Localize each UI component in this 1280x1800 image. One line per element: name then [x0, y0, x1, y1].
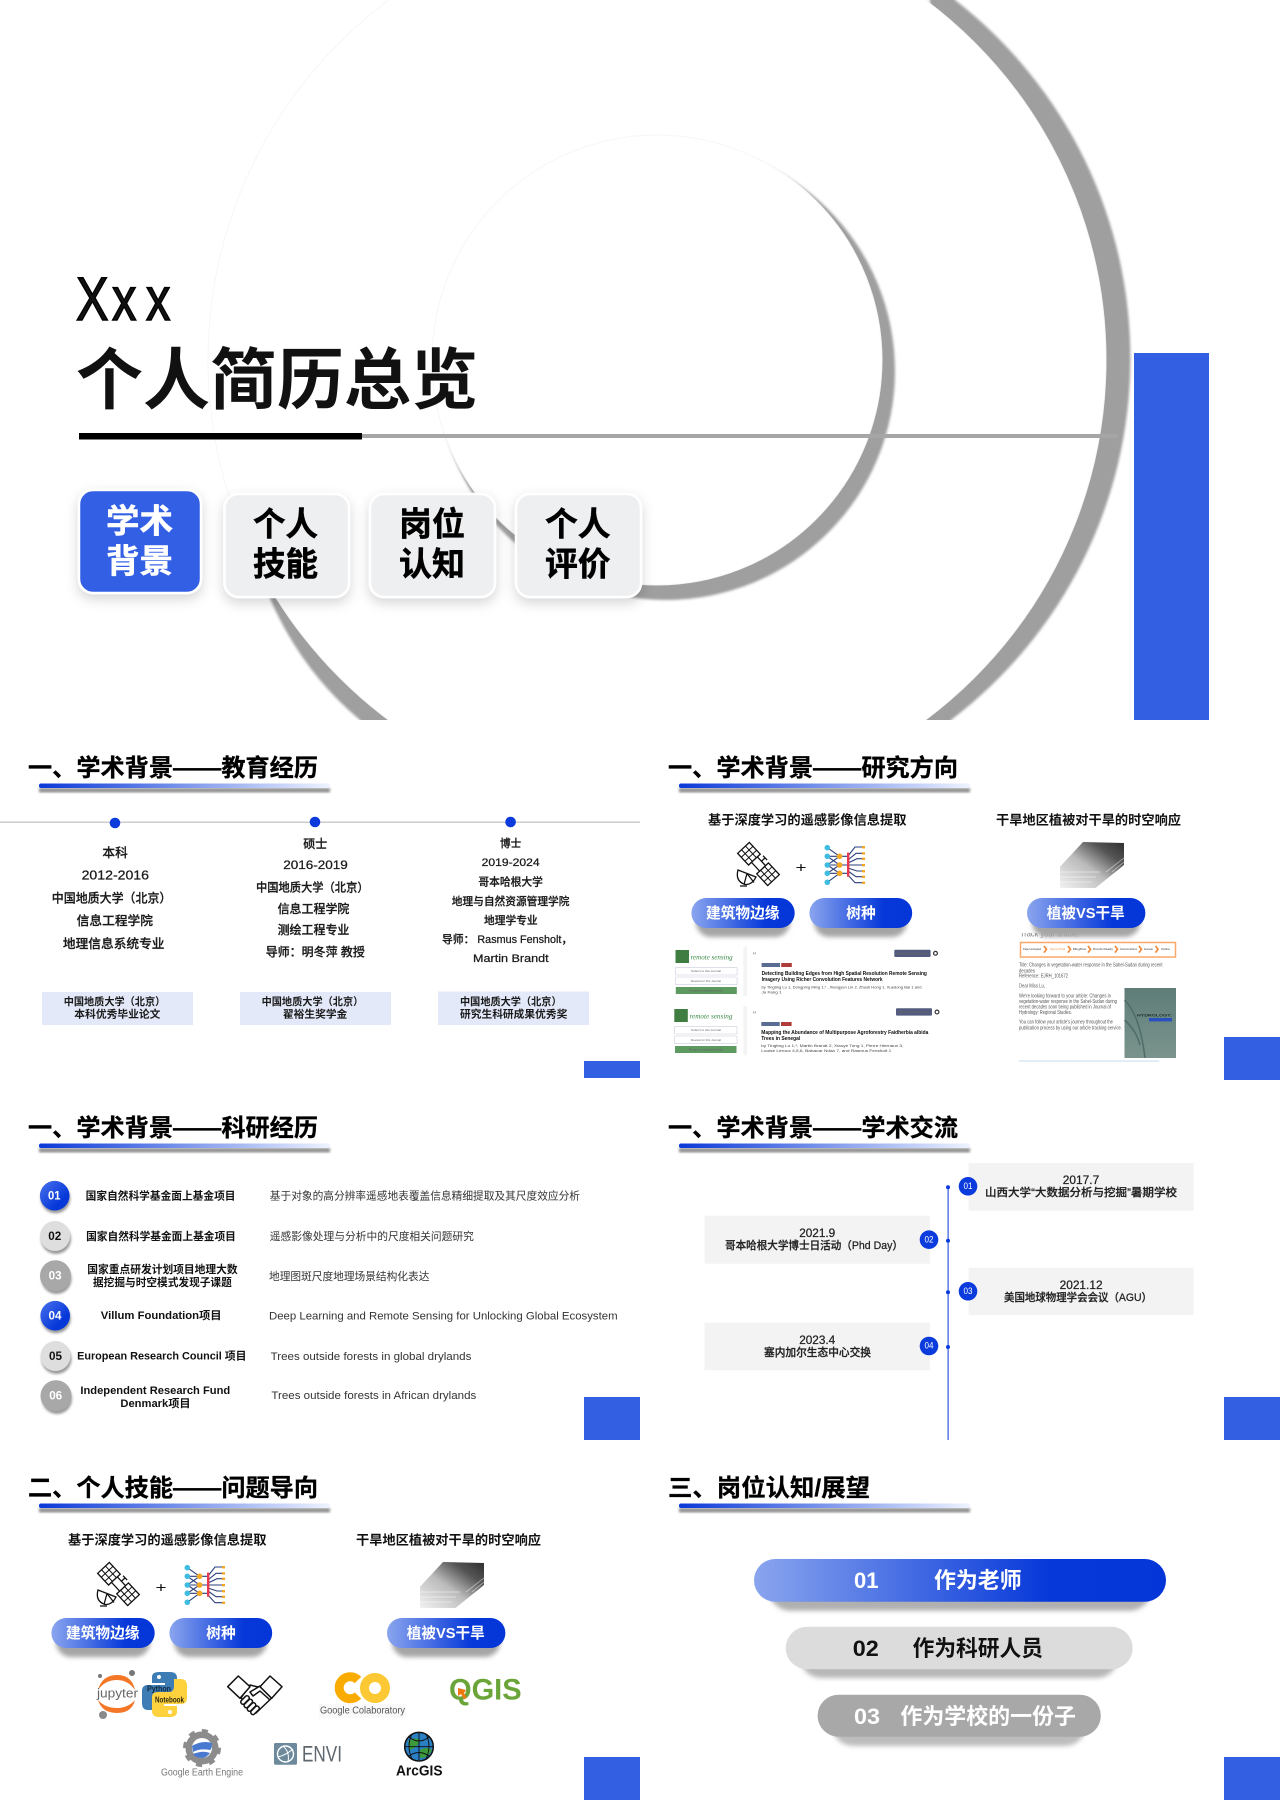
pill: building edges — [51, 1618, 155, 1657]
logo: envi — [274, 1742, 342, 1766]
row 05 — [40, 1341, 471, 1374]
row 04: Villum Foundation项目 — [101, 1310, 222, 1322]
award box 3 — [438, 992, 589, 1025]
thumbnail: journal letter: Hydrology: Regional Studies. — [1019, 1010, 1072, 1016]
thumbnail: journal letter: We're looking forward to your article: Changes in — [1019, 993, 1111, 999]
corner block — [584, 1397, 640, 1440]
pill: tree species: 树种 — [846, 904, 876, 922]
thumbnail: journal letter: Proofs Ready — [1093, 947, 1114, 951]
inner white circle — [432, 135, 882, 585]
thumbnail: journal letter: Rights — [1073, 947, 1087, 951]
outer white circle — [208, 0, 1106, 720]
bar 03: as a school member: 作为学校的一份子 — [900, 1704, 1076, 1729]
vertical timeline — [946, 1185, 950, 1440]
thumbnail: paper 1: H — [753, 950, 756, 956]
nav pill: personal skills: 个人 — [253, 506, 318, 542]
thumbnail: paper 1: Detecting Building Edges from High Spatial Resolution Remote Sensing — [762, 971, 927, 977]
image: data cube — [420, 1562, 484, 1608]
nav pill: academic background: 背景 — [106, 542, 173, 580]
thumbnail: journal letter: HYDROLOGY: — [1137, 1012, 1172, 1018]
thumbnail: paper 2 — [674, 1006, 939, 1055]
thumbnail: paper 1: Imagery Using Richer Convolution Features Network — [762, 977, 883, 983]
column: master: 信息工程学院 — [278, 901, 349, 916]
thumbnail: journal letter: Paper Accepted — [1023, 947, 1042, 951]
logo: jupyter: jupyter — [96, 1686, 139, 1700]
title: name: Xxx — [76, 265, 171, 333]
event 2021.12: 2021.12 — [1060, 1278, 1103, 1292]
heading: academic exchange: 一、学术背景——学术交流 — [668, 1114, 958, 1142]
award box 2 — [240, 992, 391, 1025]
subheading: drought response: 干旱地区植被对干旱的时空响应 — [996, 812, 1181, 828]
column: master: 测绘工程专业 — [278, 922, 349, 937]
award box 3: 中国地质大学（北京） — [460, 995, 562, 1008]
subheading: drought response: 干旱地区植被对干旱的时空响应 — [356, 1532, 541, 1548]
thumbnail: journal letter: Issue — [1144, 947, 1154, 951]
thumbnail: paper 1 — [676, 947, 937, 996]
column: phd: 哥本哈根大学 — [478, 874, 543, 888]
panel: research experience — [28, 1115, 640, 1440]
icon: handshake — [228, 1676, 282, 1715]
column: phd: 地理学专业 — [484, 913, 538, 927]
heading underline — [679, 784, 970, 792]
column: phd: Martin Brandt — [473, 953, 549, 965]
timeline dot 1 — [110, 818, 120, 828]
row 06: Trees outside forests in African drylands — [271, 1390, 476, 1402]
event 2021.9: 2021.9 — [799, 1226, 836, 1240]
row 03: 地理图斑尺度地理场景结构化表达 — [269, 1270, 430, 1283]
award box 1: 中国地质大学（北京） — [64, 995, 165, 1008]
corner block — [584, 1757, 640, 1800]
column: bachelor: 地理信息系统专业 — [63, 936, 164, 951]
logo: envi: ENVI — [302, 1742, 342, 1766]
event 2021.9 — [704, 1216, 938, 1264]
bar 01: as a teacher — [754, 1559, 1166, 1611]
thumbnail: journal letter: decades — [1019, 968, 1035, 974]
row 06: Denmark项目 — [120, 1398, 191, 1410]
logo: arcgis: ArcGIS — [396, 1762, 442, 1780]
column: bachelor — [52, 846, 171, 951]
nav pill: self evaluation: 评价 — [545, 546, 611, 582]
event 2017.7: 2017.7 — [1063, 1173, 1100, 1187]
inner circle shadow — [437, 142, 895, 600]
subheading: deep learning: 基于深度学习的遥感影像信息提取 — [708, 812, 906, 828]
panel: job outlook — [668, 1474, 1280, 1800]
row 02: 国家自然科学基金面上基金项目 — [86, 1230, 236, 1243]
event 2023.4: 塞内加尔生态中心交换 — [764, 1345, 871, 1359]
pill: vegetation vs drought — [387, 1618, 505, 1657]
event 2017.7: 01 — [964, 1181, 972, 1192]
thumbnail: journal letter: recent decades soon being published in Journal of — [1019, 1004, 1112, 1010]
bar 02: as a researcher: 作为科研人员 — [913, 1636, 1043, 1661]
thumbnail: paper 2: Review for this Journal — [691, 1038, 721, 1042]
thumbnail: paper 2: by Tingting Lu 1,*, Martin Brandt 2, Xiaoye Tong 1, Pierre Hiernaux 3, — [761, 1044, 903, 1048]
row 05: Trees outside forests in global drylands — [271, 1351, 471, 1363]
outer circle shadow — [268, 0, 1130, 726]
timeline dot 2 — [310, 817, 320, 827]
column: master: 硕士 — [303, 837, 327, 851]
icon: neural network — [824, 845, 865, 885]
logo: arcgis — [396, 1732, 442, 1780]
logo: google colaboratory: Google Colaboratory — [320, 1706, 405, 1716]
event 2023.4: 04 — [924, 1341, 934, 1352]
column: bachelor: 本科 — [102, 846, 128, 860]
heading underline — [679, 1504, 970, 1512]
row 01: 基于对象的高分辨率遥感地表覆盖信息精细提取及其尺度效应分析 — [270, 1190, 580, 1203]
panel: research direction — [668, 754, 1280, 1080]
logo: python notebook — [142, 1672, 187, 1717]
thumbnail: paper 1: Propose a Special Issue — [689, 988, 723, 992]
row 04 — [40, 1301, 618, 1333]
timeline dot 3 — [505, 817, 516, 827]
icon: satellite — [737, 842, 780, 886]
thumbnail: paper 1: remote sensing — [691, 952, 733, 962]
row 02: 遥感影像处理与分析中的尺度相关问题研究 — [270, 1230, 474, 1243]
pill: vegetation vs drought: 植被VS干旱 — [407, 1624, 485, 1642]
event 2021.12: 03 — [964, 1286, 972, 1297]
column: bachelor: 中国地质大学（北京） — [52, 890, 171, 905]
award box 2: 中国地质大学（北京） — [262, 995, 363, 1008]
column: phd: 导师： Rasmus Fensholt， — [442, 933, 572, 946]
row 06 — [40, 1380, 476, 1414]
pill: building edges — [691, 898, 795, 937]
row 01: 国家自然科学基金面上基金项目 — [86, 1190, 235, 1203]
thumbnail: journal letter: Reference: EJRH_101672 — [1019, 974, 1068, 980]
event 2021.9: 哥本哈根大学博士日活动（Phd Day） — [725, 1238, 903, 1252]
icon: satellite — [97, 1562, 140, 1606]
row 02 — [40, 1221, 474, 1254]
column: phd: 2019-2024 — [482, 857, 540, 869]
award box 2: 翟裕生奖学金 — [283, 1008, 348, 1021]
panel: academic exchange — [668, 1114, 1280, 1440]
thumbnail: journal letter: Corrections — [1120, 947, 1138, 951]
column: phd: 地理与自然资源管理学院 — [452, 894, 569, 908]
award box 1 — [42, 992, 193, 1025]
thumbnail: journal letter: publication process by using our article tracking service. — [1019, 1025, 1122, 1031]
pill: building edges: 建筑物边缘 — [66, 1624, 140, 1642]
bar 01: as a teacher: 作为老师 — [934, 1568, 1022, 1593]
logo: jupyter — [96, 1670, 139, 1719]
thumbnail: journal letter: You can follow your article's journey throughout the — [1019, 1020, 1113, 1026]
bar 01: as a teacher: 01 — [854, 1568, 878, 1593]
heading: research direction: 一、学术背景——研究方向 — [668, 754, 958, 782]
panel: education — [0, 754, 640, 1078]
corner block — [584, 1061, 640, 1078]
row 06: 06 — [49, 1389, 63, 1403]
column: bachelor: 2012-2016 — [82, 868, 149, 882]
nav pill: job understanding — [370, 494, 495, 597]
bar 03: as a school member — [818, 1695, 1101, 1746]
thumbnail: paper 1: Order Article Reprints — [897, 951, 928, 955]
title: personal resume overview: 个人简历总览 — [76, 344, 478, 418]
thumbnail: journal letter: Online — [1161, 947, 1171, 951]
row 03: 国家重点研发计划项目地理大数 — [87, 1263, 238, 1276]
event 2023.4: 2023.4 — [799, 1333, 836, 1347]
nav pill: job understanding: 认知 — [399, 546, 465, 582]
thumbnail: paper 2: Louise Leroux 4,5,6, Babacar Ndao 7, and Rasmus Fensholt 1 — [761, 1049, 892, 1053]
row 02: 02 — [48, 1229, 62, 1243]
bar 02: as a researcher — [786, 1627, 1133, 1678]
logo: python notebook: Notebook — [155, 1696, 184, 1704]
nav pill: self evaluation: 个人 — [545, 506, 611, 542]
pill: tree species — [169, 1618, 272, 1657]
heading: job outlook: 三、岗位认知/展望 — [668, 1474, 870, 1502]
column: master: 导师：明冬萍 教授 — [266, 944, 365, 959]
panel: hero cover — [73, 0, 1209, 720]
logo: qgis: QGIS — [449, 1674, 522, 1706]
heading underline — [39, 784, 330, 792]
row 05: 05 — [49, 1349, 62, 1363]
bar 02: as a researcher: 02 — [853, 1636, 879, 1661]
row 04: Deep Learning and Remote Sensing for Unlocking Global Ecosystem — [269, 1310, 618, 1322]
award box 1: 本科优秀毕业论文 — [74, 1008, 161, 1021]
timeline line — [0, 822, 640, 823]
heading: education: 一、学术背景——教育经历 — [28, 754, 318, 782]
event 2017.7: 山西大学“大数据分析与挖掘”暑期学校 — [985, 1185, 1177, 1199]
corner block — [1224, 1397, 1280, 1440]
panel: skills — [28, 1475, 640, 1800]
nav pill: job understanding: 岗位 — [399, 506, 465, 542]
pill: building edges: 建筑物边缘 — [706, 904, 780, 922]
subheading: deep learning: 基于深度学习的遥感影像信息提取 — [68, 1532, 266, 1548]
nav pill: personal skills — [224, 494, 349, 597]
nav pill: self evaluation — [516, 494, 641, 597]
icon: neural network — [184, 1565, 225, 1605]
thumbnail: paper 2: Propose a Special Issue — [689, 1048, 723, 1052]
thumbnail: paper 2: Trees in Senegal — [761, 1036, 801, 1042]
heading underline — [679, 1144, 970, 1152]
row 01: 01 — [48, 1189, 61, 1203]
thumbnail: paper 1: Submit to this Journal — [691, 969, 721, 973]
title rule: black — [79, 433, 362, 440]
event 2021.12: 美国地球物理学会会议（AGU） — [1004, 1290, 1152, 1304]
row 06: Independent Research Fund — [80, 1385, 230, 1397]
row 05: European Research Council 项目 — [77, 1351, 246, 1363]
nav pill: academic background — [79, 490, 201, 593]
logo: google colaboratory — [319, 1677, 406, 1718]
row 03 — [40, 1260, 430, 1294]
thumbnail: journal letter: Dear Miss Lu, — [1019, 984, 1045, 990]
plus sign: + — [796, 859, 806, 875]
thumbnail: journal letter: Sent to Prod — [1050, 947, 1066, 951]
row 04: 04 — [48, 1309, 62, 1323]
column: master — [256, 837, 369, 959]
column: phd — [442, 836, 572, 965]
thumbnail: paper 2: Order Article Reprints — [898, 1010, 930, 1014]
pill: tree species — [809, 898, 912, 937]
thumbnail: paper 2: H — [753, 1010, 756, 1014]
thumbnail: journal letter: Title: Changes in vegetation-water response in the Sahel-Sudan during recent — [1019, 963, 1163, 969]
thumbnail: paper 1: by Tingting Lu 1, Dongping Ming 1,* , Xiangyun Lin 2, Zhuoli Hong 1, Xuedong Bai 1 and — [762, 985, 922, 989]
corner block — [1224, 1757, 1280, 1800]
column: master: 中国地质大学（北京） — [256, 879, 369, 894]
thumbnail: paper 1: Review for this Journal — [691, 979, 721, 983]
heading: research experience: 一、学术背景——科研经历 — [28, 1115, 318, 1142]
thumbnail: paper 2: Mapping the Abundance of Multipurpose Agroforestry Faidherbia albida — [761, 1030, 929, 1036]
heading: skills: 二、个人技能——问题导向 — [28, 1475, 318, 1502]
event 2021.12 — [959, 1268, 1194, 1315]
heading underline — [39, 1504, 330, 1512]
logo: google earth engine: Google Earth Engine — [161, 1768, 243, 1778]
award box 3: 研究生科研成果优秀奖 — [460, 1008, 568, 1021]
thumbnail: journal letter — [1019, 925, 1180, 1062]
thumbnail: paper 2: Submit to this Journal — [691, 1028, 721, 1032]
column: bachelor: 信息工程学院 — [77, 913, 153, 928]
column: phd: 博士 — [500, 836, 521, 850]
event 2023.4 — [704, 1323, 938, 1370]
pill: vegetation vs drought: 植被VS干旱 — [1047, 904, 1125, 922]
thumbnail: journal letter: Track your article! — [1020, 930, 1079, 938]
image: data cube — [1060, 842, 1124, 888]
nav pill: academic background: 学术 — [106, 502, 173, 540]
column: master: 2016-2019 — [283, 858, 348, 872]
logo: google earth engine — [161, 1731, 243, 1778]
thumbnail: journal letter: vegetation-water response in the Sahel-Sudan during — [1019, 999, 1117, 1005]
bar 03: as a school member: 03 — [854, 1704, 880, 1729]
row 01 — [40, 1181, 580, 1213]
thumbnail: paper 1: Ju Fang 1 — [762, 990, 782, 994]
event 2021.9: 02 — [924, 1234, 934, 1245]
title rule: grey — [362, 434, 1118, 438]
heading underline — [39, 1144, 330, 1152]
nav pill: personal skills: 技能 — [253, 546, 318, 582]
pill: tree species: 树种 — [206, 1624, 236, 1642]
blue side bar — [1134, 353, 1209, 720]
plus sign: + — [156, 1579, 166, 1595]
logo: python notebook: Python — [147, 1684, 171, 1694]
row 03: 03 — [49, 1269, 62, 1283]
row 03: 据挖掘与时空模式发现子课题 — [93, 1276, 232, 1289]
pill: vegetation vs drought — [1027, 898, 1145, 937]
thumbnail: paper 2: remote sensing — [690, 1012, 733, 1020]
event 2017.7 — [959, 1163, 1194, 1211]
corner block — [1224, 1037, 1280, 1080]
